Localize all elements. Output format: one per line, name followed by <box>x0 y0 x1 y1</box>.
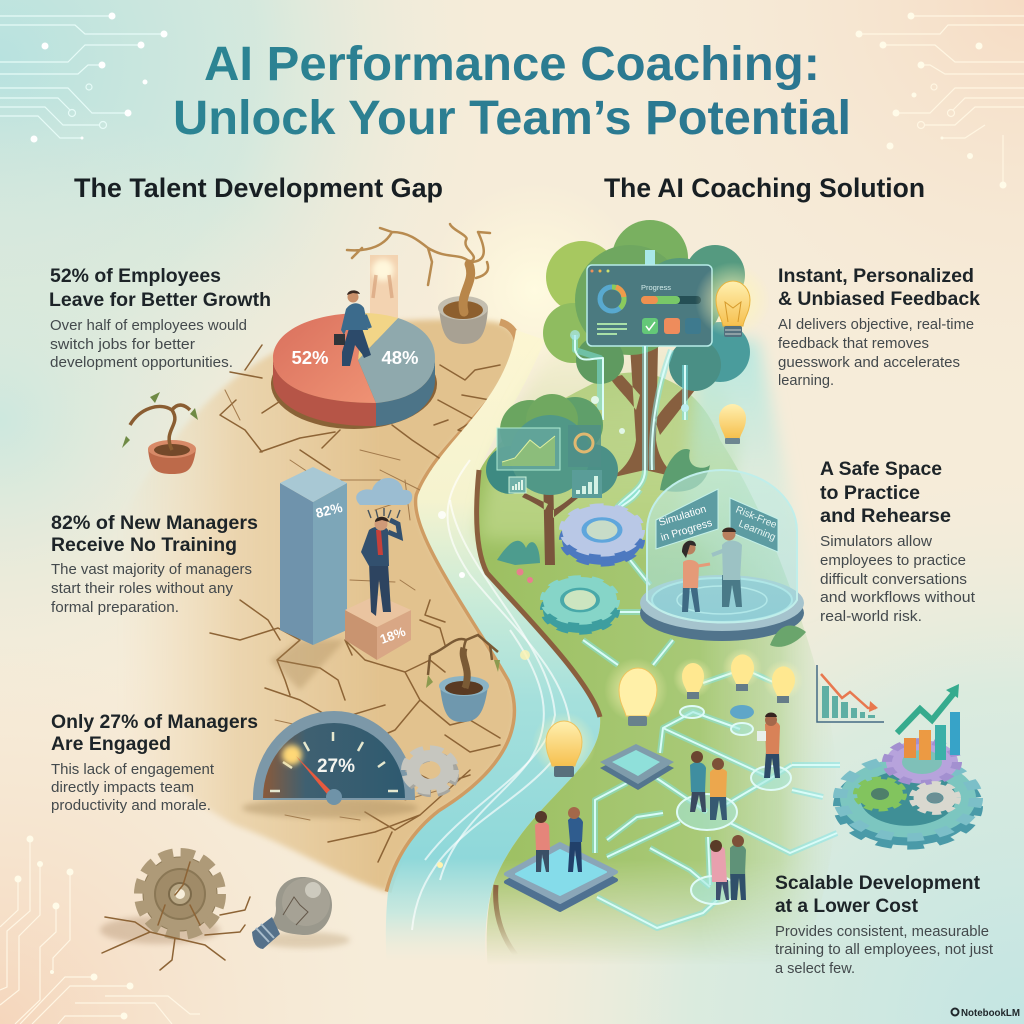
people: standing on node pair <box>690 751 727 820</box>
text block: scalable development: a select few. <box>775 961 855 977</box>
network nodes <box>677 706 791 904</box>
cracked dry land <box>90 320 517 892</box>
dashboard panel: Progress <box>641 283 671 292</box>
circuit decoration: bottom left <box>0 836 200 1024</box>
gauge: 27% engagement <box>242 713 418 818</box>
panel: line chart <box>497 425 602 498</box>
text block: 27% stat: productivity and morale. <box>51 798 211 814</box>
text block: 27% stat: Only 27% of Managers <box>51 711 258 733</box>
text block: 82% stat <box>51 512 258 616</box>
sign: risk-free learning: Risk-Free <box>734 505 779 531</box>
text block: 52% stat: Over half of employees would <box>50 318 247 334</box>
gear: teal <box>544 578 616 632</box>
text block: scalable development: training to all employees, not just <box>775 942 993 958</box>
arrowhead <box>946 684 959 698</box>
bulb: row 3 <box>763 660 803 703</box>
circuit network <box>595 673 840 928</box>
river current streaks <box>412 460 570 930</box>
text block: instant feedback: feedback that removes <box>778 336 929 352</box>
icon: rain cloud <box>356 478 412 518</box>
sign: simulation in progress: Simulation <box>657 503 708 529</box>
gear: blue <box>564 506 640 563</box>
person: with tablet <box>757 712 780 778</box>
pie chart: 52% vs 48% <box>271 313 437 429</box>
icon: dim light bulb <box>252 877 350 949</box>
sign: risk-free learning <box>730 498 779 552</box>
text block: 82% stat: formal preparation. <box>51 600 179 616</box>
gear stack with rising chart <box>840 693 976 846</box>
river <box>386 330 600 1015</box>
simulation dome <box>640 470 804 641</box>
bar chart block: 18%: 18% <box>378 624 408 647</box>
sign: simulation in progress: in Progress <box>659 517 714 544</box>
sign: simulation in progress <box>656 489 718 549</box>
text block: safe space: A Safe Space <box>820 458 942 480</box>
green land <box>472 355 822 958</box>
bar chart block: 82%: 82% <box>314 500 344 521</box>
circuit decoration: top right <box>856 12 1024 188</box>
text block: 52% stat: 52% of Employees <box>50 265 221 287</box>
text block: scalable development: Provides consistent, measurable <box>775 924 989 940</box>
NotebookLM badge: NotebookLM <box>961 1007 1020 1019</box>
text block: safe space: Simulators allow <box>820 534 932 550</box>
bar chart block: 82% <box>270 467 347 690</box>
pie labels <box>291 347 419 368</box>
text block: safe space: real-world risk. <box>820 609 922 625</box>
title: Unlock Your Team’s Potential <box>173 92 851 145</box>
text block: safe space: employees to practice <box>820 553 966 569</box>
platform: chip under bulb <box>600 744 674 790</box>
pie labels: 52% <box>291 347 329 368</box>
text block: instant feedback: Instant, Personalized <box>778 265 974 287</box>
bulb: left <box>532 712 596 777</box>
text block: safe space: and Rehearse <box>820 505 951 527</box>
text block: 82% stat: The vast majority of managers <box>51 562 252 578</box>
text block: instant feedback: AI delivers objective, real-time <box>778 317 974 333</box>
text block: 52% stat: switch jobs for better <box>50 337 195 353</box>
text block: 52% stat <box>49 265 271 371</box>
text block: instant feedback <box>778 265 980 389</box>
text block: safe space: to Practice <box>820 482 920 504</box>
text block: 27% stat: This lack of engagement <box>51 762 214 778</box>
light beam from bulb <box>680 340 815 620</box>
text block: 52% stat: Leave for Better Growth <box>49 289 271 311</box>
title: AI Performance Coaching: <box>204 38 820 91</box>
icon: dead tree in blue pot <box>426 635 500 722</box>
gauge ticks <box>270 732 398 791</box>
dashboard panel <box>587 250 712 346</box>
bulb: row 1 <box>673 658 713 699</box>
people in dome <box>682 528 742 612</box>
text block: 82% stat: Receive No Training <box>51 534 237 556</box>
text block: scalable development: Scalable Development <box>775 872 980 894</box>
text block: 52% stat: development opportunities. <box>50 355 233 371</box>
circuit decoration: top left <box>0 12 168 142</box>
text block: 27% stat <box>51 711 258 814</box>
text block: 82% stat: start their roles without any <box>51 581 234 597</box>
text block: safe space: and workflows without <box>820 590 975 606</box>
heading: talent development gap: The Talent Development Gap <box>74 173 443 203</box>
icon: wilted plant in pot <box>122 392 198 474</box>
people: pair at lower node <box>710 835 746 900</box>
icon: pot with dead tree <box>347 224 490 344</box>
dry land cracks <box>210 345 508 862</box>
text block: scalable development <box>775 872 993 977</box>
bar chart block: 18% <box>345 595 411 660</box>
text block: 82% stat: 82% of New Managers <box>51 512 258 534</box>
stacked disc <box>730 705 754 719</box>
heading: AI coaching solution: The AI Coaching Solution <box>604 173 925 203</box>
text block: instant feedback: learning. <box>778 373 834 389</box>
text block: instant feedback: & Unbiased Feedback <box>778 288 980 310</box>
pie labels: 48% <box>381 347 419 368</box>
text block: instant feedback: guesswork and accelerates <box>778 355 960 371</box>
icon: exit door glow <box>370 255 398 318</box>
large tree <box>543 220 750 478</box>
white gear <box>912 783 958 813</box>
plant right of dome <box>770 626 806 647</box>
platform: base with two people <box>506 844 616 910</box>
circuit lines from tree to gears <box>583 490 673 665</box>
bulb: row 2 <box>722 648 762 691</box>
text block: safe space <box>820 458 975 625</box>
sign: risk-free learning: Learning <box>737 519 777 543</box>
text block: 27% stat: Are Engaged <box>51 733 171 755</box>
icon: cracked broken gear <box>100 853 250 970</box>
small tree <box>486 394 618 565</box>
text block: scalable development: at a Lower Cost <box>775 895 918 917</box>
green gear <box>856 778 904 810</box>
plants by small tree <box>497 449 710 583</box>
circuit lines on tree <box>570 330 689 510</box>
icon: grey gear <box>405 749 455 792</box>
cost down chart <box>817 665 884 722</box>
gauge: 27% engagement: 27% <box>317 756 355 777</box>
figure: stressed manager <box>361 517 400 616</box>
bulb lit top right <box>695 262 771 338</box>
bulb: glowing large <box>604 658 668 726</box>
bulb second <box>719 404 746 444</box>
text block: 27% stat: directly impacts team <box>51 780 194 796</box>
people: pair on base <box>535 807 583 872</box>
text block: safe space: difficult conversations <box>820 572 967 588</box>
title <box>173 38 851 145</box>
rising bars <box>904 712 960 760</box>
rising arrow <box>897 693 954 733</box>
figure: man walking with briefcase <box>334 290 371 366</box>
